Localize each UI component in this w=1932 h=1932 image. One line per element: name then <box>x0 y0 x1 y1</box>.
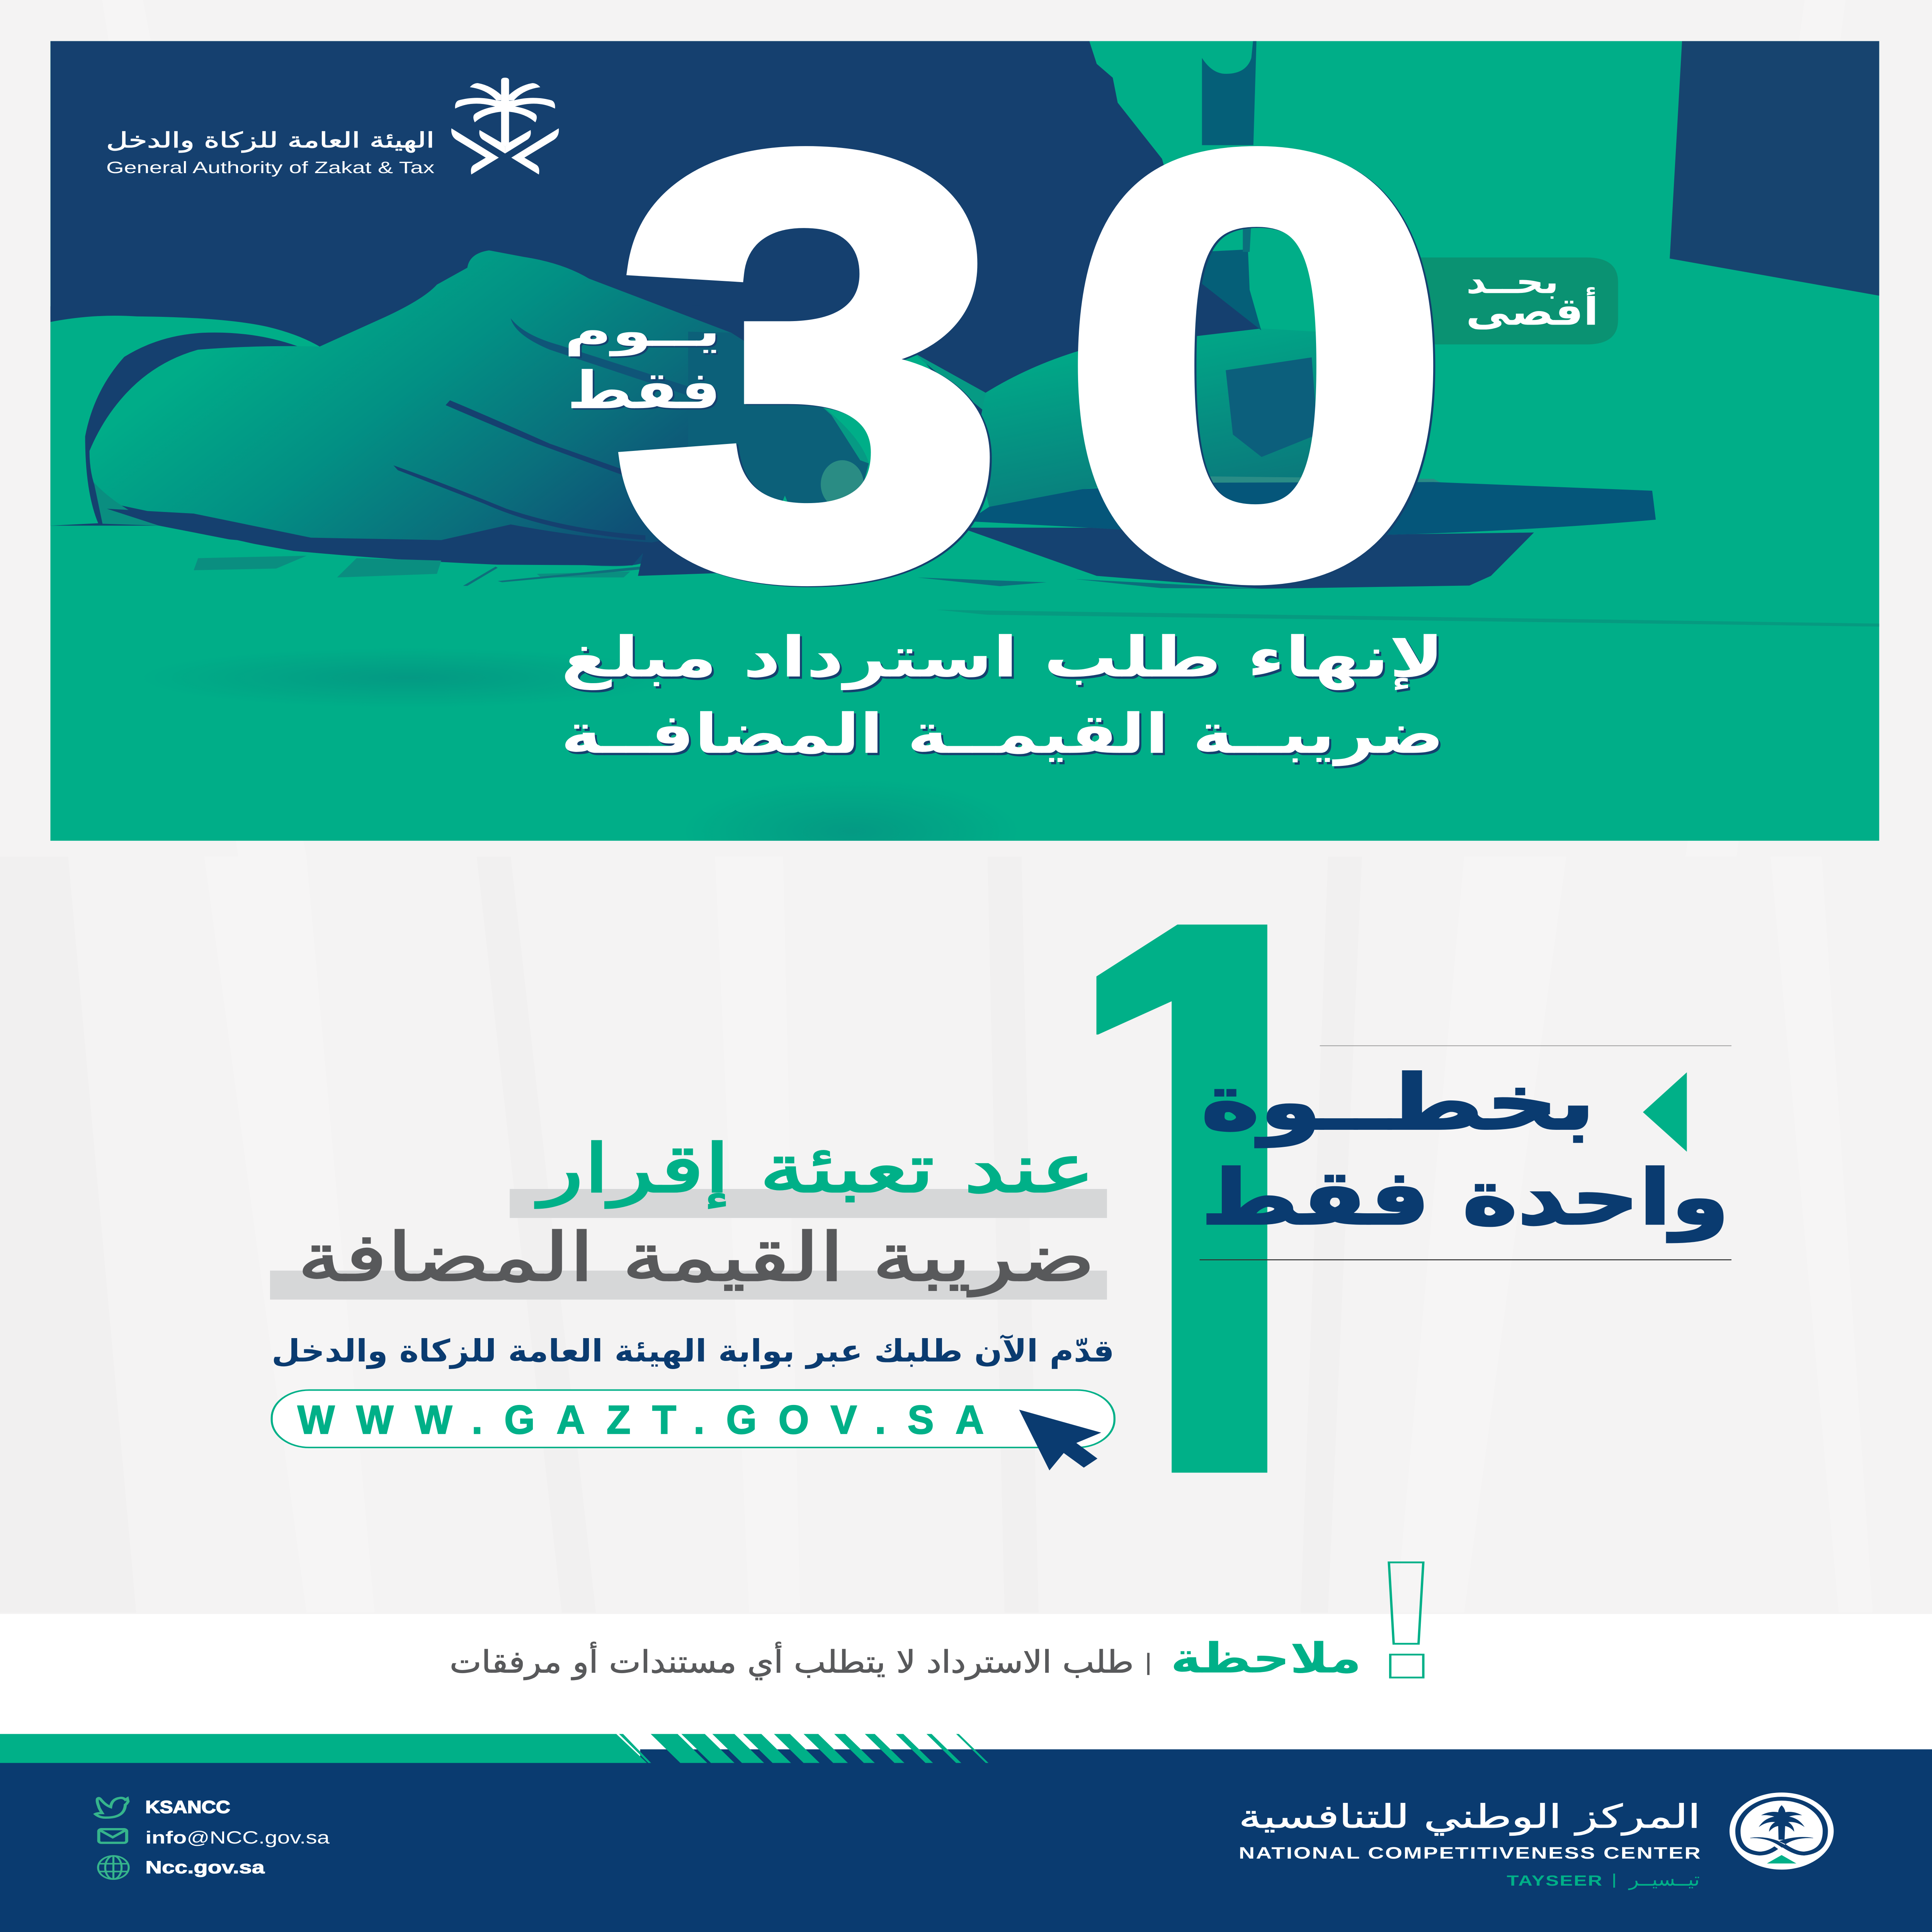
panel: one step <box>270 924 1731 1473</box>
GAZT logo <box>106 78 559 177</box>
emblem wings <box>1750 1837 1813 1848</box>
text: VAT: ضريبة القيمة المضافة <box>298 1219 1095 1297</box>
emblem palm <box>1759 1805 1804 1840</box>
green ribbon with stripes <box>0 1734 988 1763</box>
hand photo background <box>49 41 1879 884</box>
icon: GAZT palm emblem <box>451 78 559 175</box>
contact: globe icon <box>98 1856 129 1879</box>
emblem triangle <box>1767 1855 1796 1864</box>
word: day: يــوم <box>566 308 723 358</box>
label: days only <box>564 306 723 422</box>
word: only: فقط <box>567 361 721 420</box>
panel: note band <box>0 1562 1932 1765</box>
icon: mouse cursor <box>1019 1410 1101 1470</box>
headline <box>561 624 1446 769</box>
big number 1: 1 <box>983 752 1432 1641</box>
tayseer bar <box>1613 1874 1615 1888</box>
NCC emblem <box>1730 1793 1834 1869</box>
NCC name english: NATIONAL COMPETITIVENESS CENTER <box>1239 1844 1701 1862</box>
note label: ملاحظة <box>1170 1634 1362 1682</box>
step line 2: واحدة فقط <box>1201 1153 1729 1242</box>
headline line 2: ضريبــة القيمــة المضافــة <box>561 702 1444 767</box>
panel: hero photo with headline <box>49 31 1879 884</box>
emblem disc <box>1730 1793 1834 1869</box>
word: day: يــوم <box>564 306 721 357</box>
headline line 2: ضريبــة القيمــة المضافــة <box>563 704 1446 769</box>
emblem ribbon <box>1738 1799 1825 1854</box>
note separator <box>1147 1653 1150 1675</box>
authority name arabic: الهيئة العامة للزكاة والدخل <box>106 128 434 153</box>
badge line 1: بحــد <box>1466 262 1559 301</box>
bottom rule <box>1200 1259 1731 1260</box>
contact: twitter handle: KSANCC <box>145 1798 230 1817</box>
highlight bar 1 <box>510 1189 1107 1218</box>
text: apply now: قدّم الآن طلبك عبر بوابة الهيئة العامة للزكاة والدخل <box>272 1333 1114 1369</box>
contact: twitter icon <box>95 1798 128 1818</box>
one step text <box>1201 1059 1729 1242</box>
note text: طلب الاسترداد لا يتطلب أي مستندات أو مرفقات <box>450 1641 1134 1680</box>
footer <box>0 1734 1932 1932</box>
highlight bar 2 <box>270 1270 1107 1299</box>
badge line 2: أقصى <box>1466 287 1599 334</box>
top rule <box>1320 1045 1731 1046</box>
big number 30: 30 <box>613 31 1452 698</box>
NCC name arabic: المركز الوطني للتنافسية <box>1239 1798 1701 1836</box>
badge: max limit <box>1413 257 1618 344</box>
url box <box>272 1390 1114 1447</box>
icon: exclamation mark <box>1389 1562 1423 1677</box>
pointer triangle <box>1643 1072 1687 1152</box>
contact: email: info@NCC.gov.sa <box>145 1828 330 1847</box>
step line 1: بخطــوة <box>1201 1059 1595 1147</box>
url text: WWW.GAZT.GOV.SA <box>298 1397 984 1442</box>
big number 30: 30 <box>615 32 1454 699</box>
tayseer arabic: تيــسيــر <box>1628 1869 1700 1890</box>
tayseer latin: TAYSEER <box>1507 1872 1602 1889</box>
contact: website: Ncc.gov.sa <box>145 1858 265 1877</box>
authority name english: General Authority of Zakat & Tax <box>106 158 435 177</box>
headline line 1: لإنهاء طلب استرداد مبلغ <box>563 627 1446 693</box>
text: when filling return: عند تعبئة إقرار <box>535 1130 1095 1208</box>
word: only: فقط <box>569 362 723 422</box>
badge background <box>1413 257 1618 344</box>
contact: mail icon <box>99 1829 127 1843</box>
footer background <box>0 1749 1932 1932</box>
white band <box>0 1614 1932 1765</box>
headline line 1: لإنهاء طلب استرداد مبلغ <box>561 624 1444 690</box>
